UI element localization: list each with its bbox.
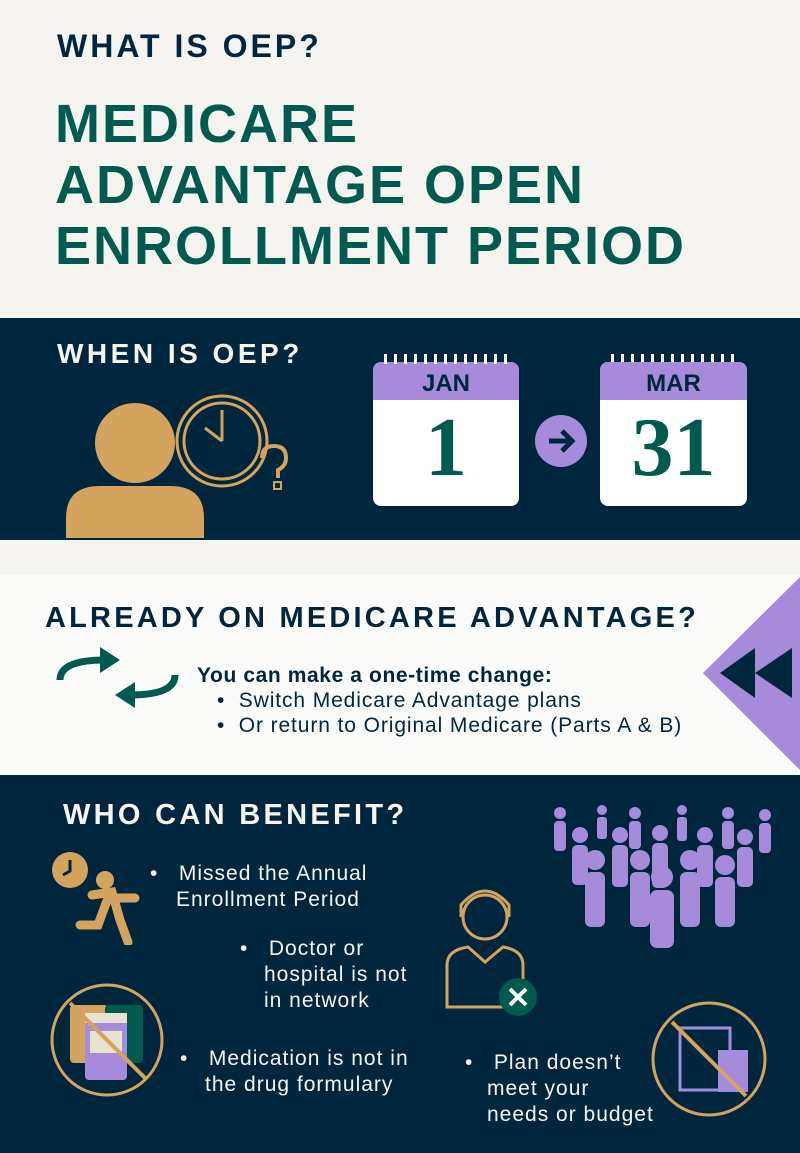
text: plan budget: needs or budget	[487, 1103, 654, 1126]
text: medication: the drug formulary	[205, 1073, 393, 1096]
calendar: Jan 1: JAN	[422, 370, 470, 397]
icon: no budget	[652, 1002, 766, 1116]
panel: who can benefit	[0, 775, 800, 1153]
heading: WHO CAN BENEFIT?	[63, 799, 407, 831]
panel: when is OEP	[0, 318, 800, 540]
text: plan budget: • Plan doesn’t	[465, 1051, 621, 1074]
icon: swap arrows	[56, 647, 178, 708]
icon: doctor with x	[446, 890, 537, 1016]
text: one-time change: You can make a one-time change:	[197, 664, 552, 687]
text: doctor: hospital is not	[264, 963, 407, 986]
heading: ALREADY ON MEDICARE ADVANTAGE?	[45, 602, 699, 634]
text: one-time change: • Or return to Original Medicare (Parts A & B)	[217, 714, 682, 737]
text: doctor	[240, 937, 407, 1012]
text: medication: • Medication is not in	[180, 1047, 409, 1070]
arrow circle	[535, 415, 587, 467]
calendar: Jan 1: 1	[425, 401, 467, 494]
calendar: Mar 31: MAR	[646, 370, 701, 397]
text: missed AEP	[150, 862, 367, 911]
icon: crowd	[554, 805, 771, 948]
main title	[55, 94, 686, 276]
calendar: Jan 1	[373, 362, 519, 506]
heading: WHEN IS OEP?	[57, 338, 303, 369]
icon: no medication	[50, 984, 164, 1096]
main title: ADVANTAGE OPEN	[55, 155, 585, 215]
section: title	[0, 0, 800, 318]
text: missed AEP: Enrollment Period	[176, 888, 360, 911]
main title: MEDICARE	[55, 94, 359, 154]
text: doctor: • Doctor or	[240, 937, 364, 960]
panel: already on medicare advantage	[0, 575, 800, 775]
icon: rewind triangle	[703, 577, 800, 770]
text: one-time change: • Switch Medicare Advantage plans	[217, 689, 582, 712]
calendar: Mar 31	[600, 362, 747, 506]
main title: ENROLLMENT PERIOD	[55, 216, 686, 276]
text: medication	[180, 1047, 409, 1096]
text: plan budget: meet your	[487, 1077, 589, 1100]
text: one-time change	[197, 664, 682, 737]
text: plan budget	[465, 1051, 654, 1126]
calendar: Mar 31: 31	[632, 401, 716, 494]
text: missed AEP: • Missed the Annual	[150, 862, 367, 885]
calendar rings	[384, 354, 734, 364]
icon: running late	[52, 852, 140, 945]
subtitle: WHAT IS OEP?	[57, 28, 322, 64]
icon: person with clock	[66, 394, 288, 538]
text: doctor: in network	[264, 989, 370, 1012]
